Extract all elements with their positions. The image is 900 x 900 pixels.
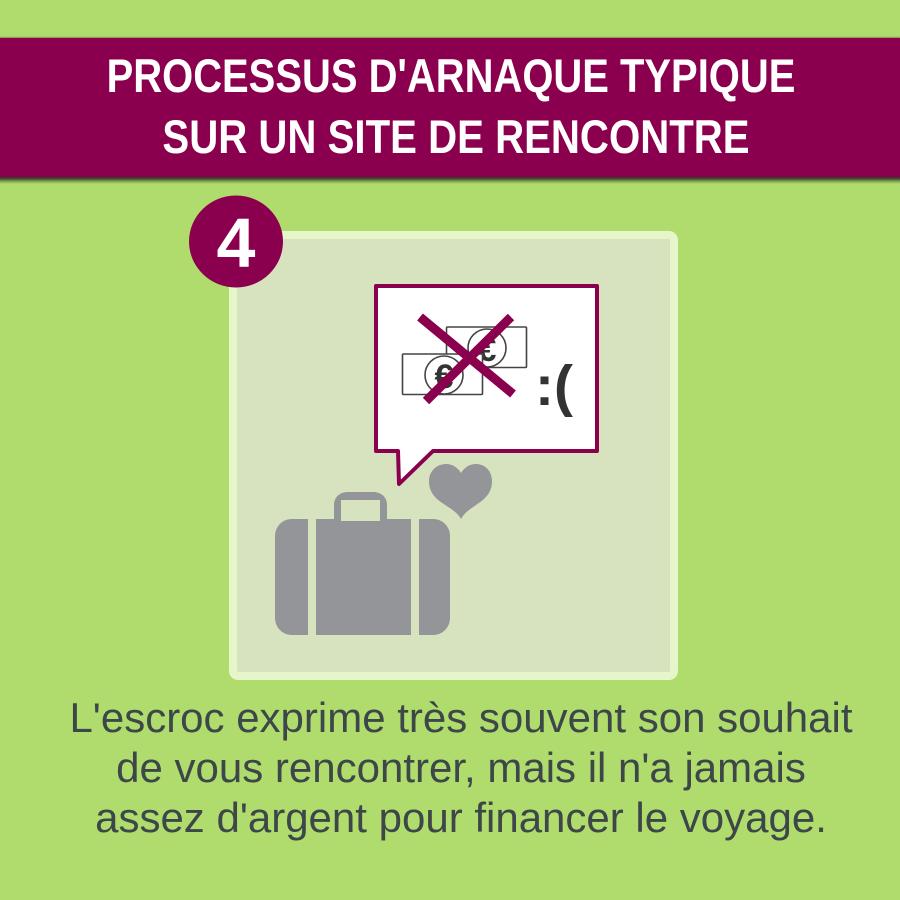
icon: euro banknotes: €	[478, 331, 497, 369]
icon: euro banknotes	[402, 327, 526, 396]
body line 1: L'escroc exprime très souvent son souhait	[69, 694, 853, 741]
icon: euro banknotes: €	[435, 358, 454, 396]
panel: step card	[233, 235, 674, 676]
title line 2: SUR UN SITE DE RENCONTRE	[162, 110, 750, 163]
icon: suitcase	[275, 492, 450, 635]
icon: heart	[429, 464, 492, 519]
speech bubble	[376, 286, 597, 484]
sad emoticon: :(	[535, 354, 573, 418]
body line 2: de vous rencontrer, mais il n'a jamais	[116, 744, 806, 791]
icon: red cross	[420, 317, 513, 401]
body text	[69, 694, 853, 841]
title banner	[0, 38, 900, 177]
title line 1: PROCESSUS D'ARNAQUE TYPIQUE	[107, 49, 795, 102]
body line 3: assez d'argent pour financer le voyage.	[95, 794, 827, 841]
step number badge	[189, 196, 283, 288]
step number badge: 4	[217, 204, 256, 282]
